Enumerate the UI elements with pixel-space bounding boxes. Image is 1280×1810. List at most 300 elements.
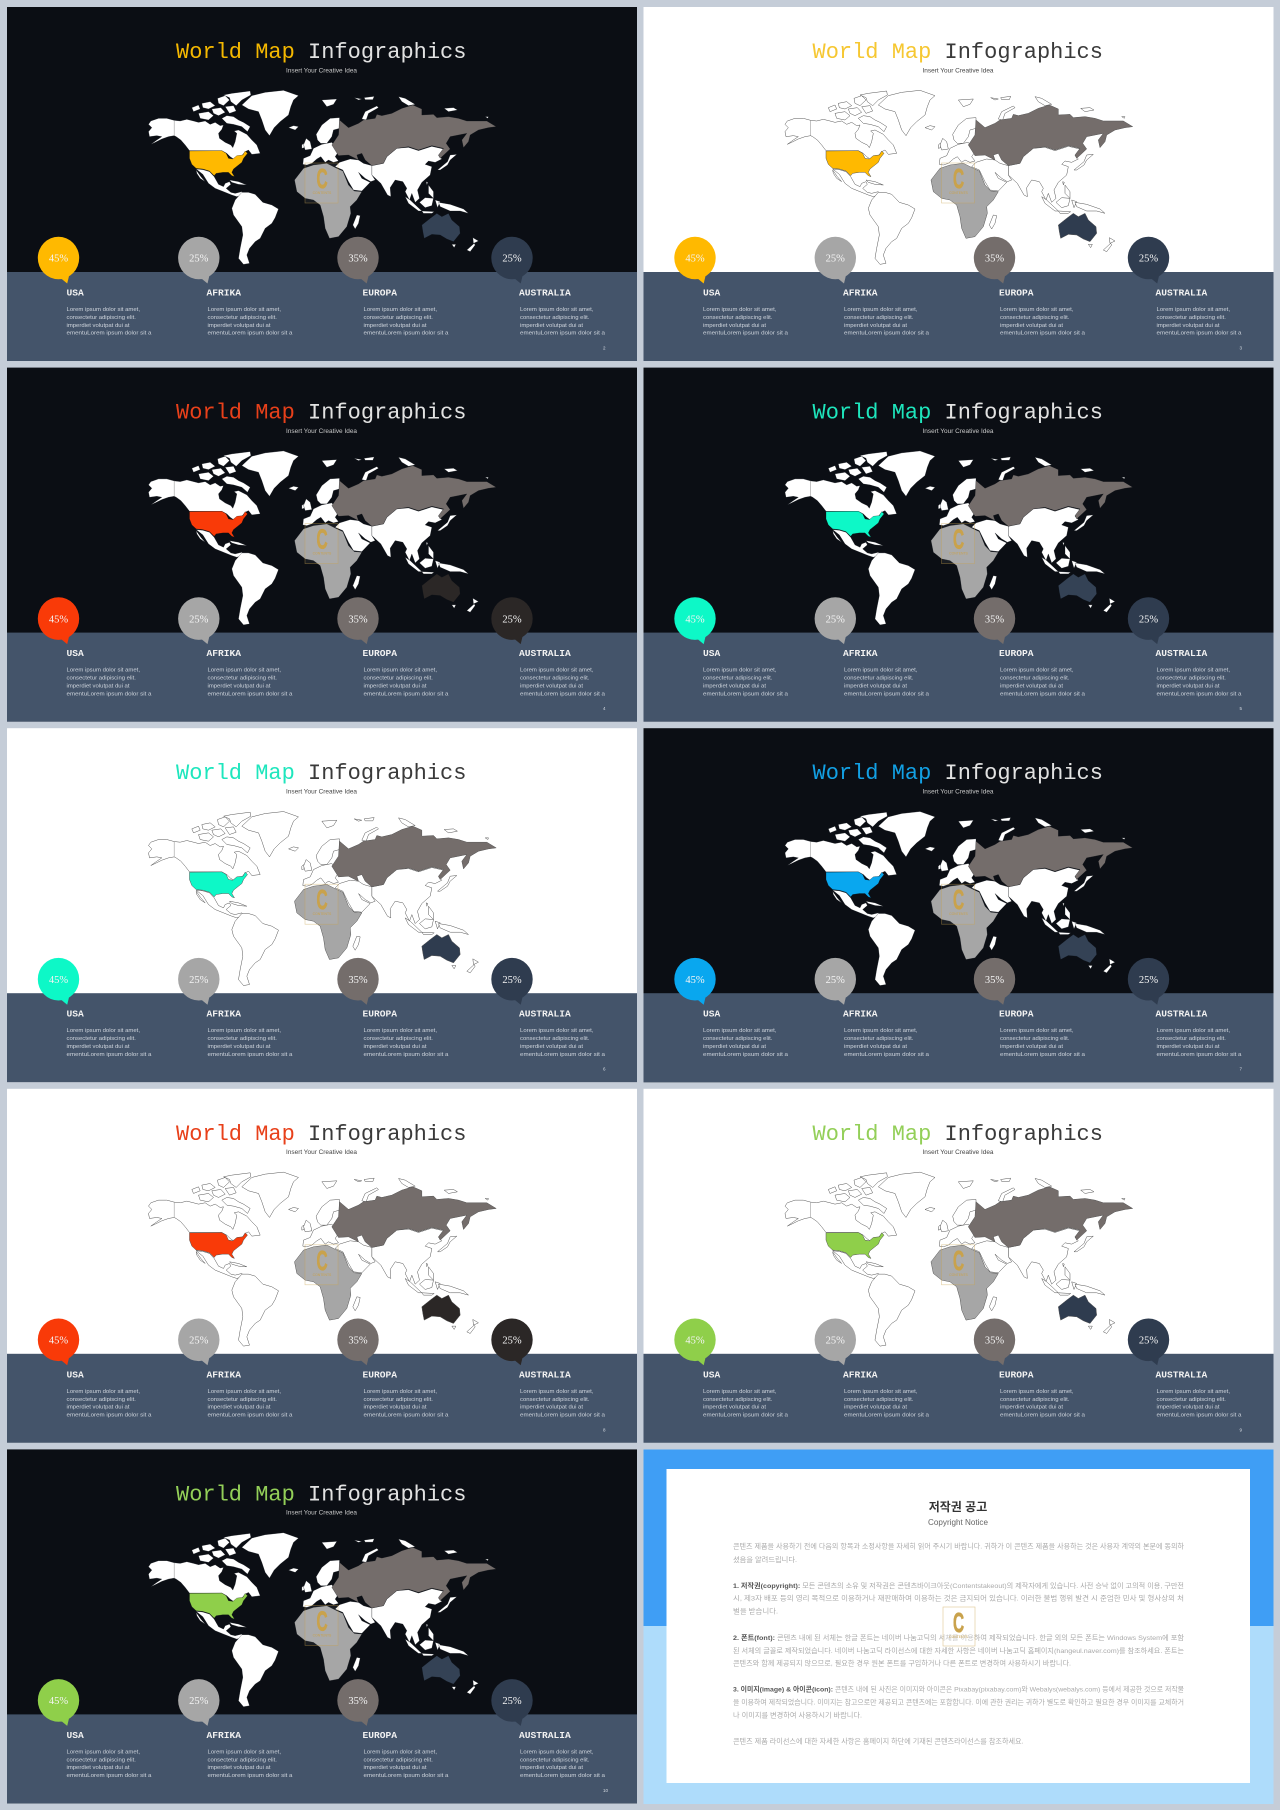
- text block: USA: imperdiet volutpat dui at: [703, 683, 766, 689]
- title: World Map Infographics: [176, 401, 466, 426]
- text block: Australia: consectetur adipiscing elit.: [1156, 1036, 1226, 1042]
- text block: Australia: Lorem ipsum dolor sit amet,: [520, 1389, 594, 1395]
- text block: USA: ementuLorem ipsum dolor sit a: [703, 331, 789, 337]
- page number: 7: [1240, 1067, 1242, 1072]
- subtitle: Insert Your Creative Idea: [922, 428, 994, 435]
- text block: Afrika: AFRIKA: [206, 1730, 241, 1741]
- text block: Afrika: AFRIKA: [206, 648, 241, 659]
- watermark: [305, 1605, 338, 1645]
- text block: Afrika: Lorem ipsum dolor sit amet,: [208, 1749, 281, 1755]
- notice body text: 2. 폰트(font): 콘텐츠 내에 된 서체는 한글 폰트는 네이버 나눔고딕의 서체를 이용하여 제작되었습니다. 한글 외의 모든 폰트는 Windows System에 포함: [733, 1633, 1184, 1642]
- text block: USA: USA: [66, 648, 84, 659]
- subtitle: Insert Your Creative Idea: [922, 1149, 994, 1156]
- watermark: C: [953, 1245, 964, 1276]
- notice body text: 벌을 받습니다.: [733, 1607, 778, 1616]
- bubble: Australia 25%: 25%: [502, 1696, 522, 1707]
- watermark: C: [316, 163, 328, 194]
- text block: Australia: Lorem ipsum dolor sit amet,: [1156, 307, 1230, 313]
- page number: 8: [603, 1427, 606, 1432]
- text block: Europa: [362, 1730, 449, 1779]
- watermark: C: [953, 524, 964, 555]
- text block: USA: [703, 288, 789, 337]
- page number: 10: [603, 1788, 609, 1793]
- text block: Afrika: ementuLorem ipsum dolor sit a: [844, 1052, 930, 1058]
- notice body text: 1. 저작권(copyright): 모든 콘텐츠의 소유 및 저작권은 콘텐츠바이크아웃(Contentstakeout)의 제작자에게 있습니다. 사전 승낙 없이 고의적 이용, 구만전: [733, 1581, 1184, 1590]
- bubble: Europa 35%: [337, 958, 379, 1005]
- panel: slide 7 white red: [7, 1089, 637, 1443]
- text block: Australia: imperdiet volutpat dui at: [520, 1044, 583, 1050]
- text block: Afrika: [206, 1369, 293, 1418]
- bubble: USA 45%: 45%: [49, 1696, 68, 1707]
- watermark: [305, 524, 338, 564]
- bubble: USA 45%: [38, 1679, 79, 1726]
- text block: USA: imperdiet volutpat dui at: [66, 1765, 130, 1771]
- bubble: Australia 25%: [491, 597, 533, 644]
- title: World Map Infographics: [812, 40, 1103, 65]
- text block: Afrika: [843, 1009, 930, 1058]
- world map: [148, 90, 496, 264]
- text block: Afrika: ementuLorem ipsum dolor sit a: [844, 1413, 930, 1419]
- watermark: [943, 1607, 975, 1646]
- text block: Afrika: ementuLorem ipsum dolor sit a: [208, 1773, 293, 1779]
- text block: Europa: Lorem ipsum dolor sit amet,: [364, 307, 437, 313]
- bubble: Afrika 25%: [815, 1318, 856, 1365]
- title: World Map Infographics: [176, 40, 466, 65]
- watermark: CONTENTS: [313, 552, 332, 556]
- watermark: C: [316, 524, 328, 555]
- text block: Afrika: ementuLorem ipsum dolor sit a: [208, 1052, 293, 1058]
- text block: Afrika: AFRIKA: [843, 648, 878, 659]
- page number: 4: [603, 706, 606, 711]
- bubble: Australia 25%: 25%: [502, 614, 522, 625]
- bubble: USA 45%: 45%: [49, 614, 68, 625]
- text block: USA: USA: [703, 648, 721, 659]
- text block: Afrika: AFRIKA: [206, 288, 241, 298]
- text block: Afrika: imperdiet volutpat dui at: [844, 323, 907, 329]
- text block: Australia: AUSTRALIA: [519, 1009, 571, 1020]
- bubble: Europa 35%: 35%: [348, 975, 368, 986]
- text block: Australia: ementuLorem ipsum dolor sit a: [520, 1773, 606, 1779]
- text block: Europa: consectetur adipiscing elit.: [364, 1757, 433, 1763]
- bubble: Australia 25%: [1128, 237, 1169, 284]
- bubble: Australia 25%: [491, 1318, 533, 1365]
- text block: Afrika: AFRIKA: [843, 1369, 878, 1380]
- text block: Afrika: Lorem ipsum dolor sit amet,: [844, 668, 918, 674]
- notice body text: 콘텐츠 제품을 사용하기 전에 다음의 항목과 소정사항을 자세히 읽어 주시기 바랍니다. 귀하가 이 콘텐츠 제품을 사용하는 것은 사용자 계약의 본문에 동의하: [733, 1542, 1185, 1551]
- text block: USA: ementuLorem ipsum dolor sit a: [66, 691, 152, 697]
- bubble: Europa 35%: [337, 597, 379, 644]
- bubble: Afrika 25%: 25%: [826, 1336, 845, 1347]
- text block: Europa: Lorem ipsum dolor sit amet,: [364, 668, 437, 674]
- text block: Europa: EUROPA: [999, 648, 1034, 659]
- bubble: Europa 35%: 35%: [348, 614, 368, 625]
- notice heading: 저작권 공고: [929, 1499, 987, 1514]
- panel: slide 9 dark green: [7, 1449, 637, 1803]
- world map: [148, 812, 496, 986]
- text block: Europa: imperdiet volutpat dui at: [364, 1765, 427, 1771]
- text block: USA: Lorem ipsum dolor sit amet,: [66, 1749, 140, 1755]
- text block: Europa: ementuLorem ipsum dolor sit a: [364, 1052, 449, 1058]
- text block: Australia: ementuLorem ipsum dolor sit a: [1156, 1413, 1242, 1419]
- text block: Europa: imperdiet volutpat dui at: [1000, 1044, 1063, 1050]
- bubble: USA 45%: 45%: [49, 1336, 68, 1347]
- panel: slide 2 white yellow: [644, 7, 1274, 361]
- text block: Australia: AUSTRALIA: [519, 648, 571, 659]
- text block: Afrika: [206, 288, 293, 337]
- text block: USA: Lorem ipsum dolor sit amet,: [703, 668, 777, 674]
- text block: Afrika: consectetur adipiscing elit.: [844, 676, 914, 682]
- bubble: Afrika 25%: [815, 597, 856, 644]
- text block: Australia: imperdiet volutpat dui at: [520, 683, 583, 689]
- text block: Europa: imperdiet volutpat dui at: [364, 683, 427, 689]
- bubble: Afrika 25%: 25%: [189, 1336, 209, 1347]
- text block: Australia: imperdiet volutpat dui at: [1156, 323, 1220, 329]
- text block: Australia: [1156, 1369, 1242, 1418]
- text block: Europa: imperdiet volutpat dui at: [1000, 683, 1063, 689]
- bubble: Australia 25%: 25%: [502, 254, 522, 265]
- text block: Afrika: ementuLorem ipsum dolor sit a: [208, 691, 293, 697]
- text block: Australia: Lorem ipsum dolor sit amet,: [1156, 1389, 1230, 1395]
- title: World Map Infographics: [176, 1122, 466, 1147]
- title: World Map Infographics: [812, 401, 1103, 426]
- text block: Afrika: [843, 648, 930, 697]
- text block: Europa: Lorem ipsum dolor sit amet,: [1000, 1028, 1074, 1034]
- text block: USA: consectetur adipiscing elit.: [703, 315, 773, 321]
- bubble: USA 45%: [38, 1318, 79, 1365]
- bubble: Australia 25%: [491, 237, 533, 284]
- text block: USA: [703, 1369, 789, 1418]
- bubble: Europa 35%: 35%: [348, 254, 368, 265]
- bubble: USA 45%: 45%: [685, 1336, 705, 1347]
- text block: Australia: consectetur adipiscing elit.: [520, 1397, 590, 1403]
- text block: Europa: EUROPA: [362, 648, 397, 659]
- bubble: Afrika 25%: [815, 958, 856, 1005]
- text block: USA: consectetur adipiscing elit.: [703, 676, 773, 682]
- text block: Europa: consectetur adipiscing elit.: [1000, 1036, 1070, 1042]
- text block: Europa: EUROPA: [362, 1369, 397, 1380]
- bubble: Europa 35%: 35%: [985, 614, 1004, 625]
- text block: Europa: [362, 1369, 449, 1418]
- title: World Map Infographics: [812, 1122, 1103, 1147]
- bubble: Australia 25%: 25%: [1139, 614, 1158, 625]
- text block: USA: imperdiet volutpat dui at: [703, 1405, 766, 1411]
- bubble: Europa 35%: 35%: [348, 1336, 368, 1347]
- text block: Australia: AUSTRALIA: [1156, 1369, 1208, 1380]
- bubble: USA 45%: [674, 1318, 716, 1365]
- bubble: Europa 35%: [974, 1318, 1015, 1365]
- bubble: USA 45%: [674, 237, 716, 284]
- watermark: CONTENTS: [949, 552, 969, 556]
- bubble: Afrika 25%: 25%: [826, 614, 845, 625]
- text block: USA: Lorem ipsum dolor sit amet,: [66, 1389, 140, 1395]
- text block: USA: consectetur adipiscing elit.: [66, 315, 136, 321]
- text block: Afrika: consectetur adipiscing elit.: [208, 1397, 277, 1403]
- text block: Australia: [1156, 288, 1242, 337]
- text block: Afrika: Lorem ipsum dolor sit amet,: [208, 1028, 281, 1034]
- bubble: Afrika 25%: [178, 1318, 220, 1365]
- text block: USA: ementuLorem ipsum dolor sit a: [703, 1413, 789, 1419]
- text block: Australia: imperdiet volutpat dui at: [520, 1765, 583, 1771]
- title: World Map Infographics: [176, 761, 466, 786]
- text block: USA: Lorem ipsum dolor sit amet,: [703, 1389, 777, 1395]
- notice body text: 셨음을 알려드립니다.: [733, 1555, 797, 1564]
- text block: Afrika: [206, 1009, 293, 1058]
- bubble: Afrika 25%: 25%: [189, 614, 209, 625]
- title: World Map Infographics: [176, 1482, 466, 1507]
- text block: USA: ementuLorem ipsum dolor sit a: [703, 1052, 789, 1058]
- text block: Afrika: ementuLorem ipsum dolor sit a: [208, 331, 293, 337]
- panel: copyright notice: [644, 1450, 1274, 1804]
- text block: Australia: imperdiet volutpat dui at: [520, 1405, 583, 1411]
- panel: slide 8 white green: [644, 1089, 1274, 1443]
- subtitle: Insert Your Creative Idea: [286, 1149, 357, 1156]
- text block: Australia: AUSTRALIA: [519, 288, 571, 298]
- text block: Europa: [362, 648, 449, 697]
- world map: [785, 812, 1133, 986]
- world map: [785, 90, 1133, 264]
- text block: Australia: imperdiet volutpat dui at: [1156, 1405, 1220, 1411]
- text block: Europa: consectetur adipiscing elit.: [1000, 676, 1070, 682]
- bubble: Australia 25%: 25%: [1139, 1336, 1158, 1347]
- watermark: [942, 163, 974, 203]
- text block: USA: ementuLorem ipsum dolor sit a: [66, 1773, 152, 1779]
- text block: USA: Lorem ipsum dolor sit amet,: [703, 1028, 777, 1034]
- text block: Afrika: Lorem ipsum dolor sit amet,: [844, 1389, 918, 1395]
- text block: Australia: AUSTRALIA: [1156, 288, 1208, 298]
- bubble: Afrika 25%: [178, 958, 220, 1005]
- text block: Europa: Lorem ipsum dolor sit amet,: [1000, 668, 1074, 674]
- text block: Afrika: consectetur adipiscing elit.: [208, 1757, 277, 1763]
- text block: Afrika: Lorem ipsum dolor sit amet,: [208, 668, 281, 674]
- watermark: [942, 884, 974, 924]
- text block: Australia: imperdiet volutpat dui at: [1156, 1044, 1220, 1050]
- text block: Europa: consectetur adipiscing elit.: [364, 1036, 433, 1042]
- bubble: Australia 25%: [1128, 1318, 1169, 1365]
- text block: Afrika: AFRIKA: [206, 1369, 241, 1380]
- world map: [148, 1533, 496, 1707]
- text block: Australia: ementuLorem ipsum dolor sit a: [520, 1413, 606, 1419]
- panel: slide 5 white teal: [7, 728, 637, 1082]
- notice body text: 된 서체의 글꼴로 제작되었습니다. 네이버 나눔고딕 라이선스에 대한 자세한 사항은 네이버 나눔고딕 홈페이지(hangeul.naver.com)를 참조하세요. 폰트는: [733, 1646, 1184, 1655]
- text block: USA: consectetur adipiscing elit.: [703, 1397, 773, 1403]
- text block: USA: consectetur adipiscing elit.: [66, 1397, 136, 1403]
- watermark: CONTENTS: [313, 912, 332, 916]
- text block: Europa: ementuLorem ipsum dolor sit a: [364, 331, 449, 337]
- text block: USA: Lorem ipsum dolor sit amet,: [66, 1028, 140, 1034]
- bubble: Europa 35%: 35%: [985, 254, 1004, 265]
- text block: Australia: imperdiet volutpat dui at: [520, 323, 583, 329]
- text block: USA: imperdiet volutpat dui at: [703, 323, 766, 329]
- watermark: CONTENTS: [313, 1633, 332, 1637]
- bubble: Australia 25%: 25%: [1139, 254, 1158, 265]
- text block: Afrika: Lorem ipsum dolor sit amet,: [844, 1028, 918, 1034]
- text block: Australia: Lorem ipsum dolor sit amet,: [520, 668, 594, 674]
- text block: USA: ementuLorem ipsum dolor sit a: [66, 331, 152, 337]
- text block: USA: ementuLorem ipsum dolor sit a: [66, 1413, 152, 1419]
- bubble: Afrika 25%: 25%: [189, 1696, 209, 1707]
- text block: Afrika: AFRIKA: [843, 288, 878, 298]
- text block: USA: USA: [66, 1730, 84, 1741]
- text block: Europa: imperdiet volutpat dui at: [1000, 323, 1063, 329]
- text block: Europa: Lorem ipsum dolor sit amet,: [364, 1389, 437, 1395]
- bubble: USA 45%: [38, 958, 79, 1005]
- text block: USA: imperdiet volutpat dui at: [703, 1044, 766, 1050]
- text block: Afrika: imperdiet volutpat dui at: [208, 323, 271, 329]
- bubble: Australia 25%: 25%: [502, 975, 522, 986]
- text block: Australia: Lorem ipsum dolor sit amet,: [520, 1028, 594, 1034]
- text block: USA: [66, 1009, 152, 1058]
- text block: Europa: ementuLorem ipsum dolor sit a: [1000, 331, 1086, 337]
- bubble: Afrika 25%: [178, 237, 220, 284]
- text block: Australia: Lorem ipsum dolor sit amet,: [520, 307, 594, 313]
- notice body text: 을 이용하여 제작되었습니다. 이미지는 참고으로만 제공되고 콘텐츠에는 포함합니다. 이에 관한 권리는 귀하가 별도로 확인하고 필요한 경우 이미지를 교체하거: [733, 1698, 1184, 1707]
- text block: Australia: consectetur adipiscing elit.: [520, 1757, 590, 1763]
- text block: USA: imperdiet volutpat dui at: [66, 323, 130, 329]
- bubble: Australia 25%: [1128, 958, 1169, 1005]
- text block: Europa: ementuLorem ipsum dolor sit a: [1000, 691, 1086, 697]
- text block: Europa: imperdiet volutpat dui at: [364, 1044, 427, 1050]
- text block: USA: USA: [703, 1369, 721, 1380]
- text block: Australia: ementuLorem ipsum dolor sit a: [1156, 1052, 1242, 1058]
- text block: Afrika: imperdiet volutpat dui at: [844, 1405, 907, 1411]
- notice body text: 3. 이미지(image) & 아이콘(icon): 콘텐츠 내에 된 사진은 이미지와 아이콘은 Pixabay(pixabay.com)와 Webalys(webalys.com) 등에서 제공한 것으로 저작물: [733, 1685, 1184, 1694]
- text block: Afrika: [843, 288, 930, 337]
- text block: USA: consectetur adipiscing elit.: [66, 1757, 136, 1763]
- text block: Europa: EUROPA: [999, 1009, 1034, 1020]
- bubble: Europa 35%: [974, 958, 1015, 1005]
- text block: Australia: consectetur adipiscing elit.: [1156, 315, 1226, 321]
- text block: USA: Lorem ipsum dolor sit amet,: [703, 307, 777, 313]
- world map: [148, 1172, 496, 1346]
- watermark: C: [316, 884, 328, 915]
- text block: USA: [703, 648, 789, 697]
- text block: Australia: Lorem ipsum dolor sit amet,: [1156, 668, 1230, 674]
- text block: Australia: AUSTRALIA: [519, 1369, 571, 1380]
- text block: Europa: Lorem ipsum dolor sit amet,: [364, 1028, 437, 1034]
- text block: Afrika: AFRIKA: [206, 1009, 241, 1020]
- text block: USA: imperdiet volutpat dui at: [66, 1405, 130, 1411]
- text block: Afrika: imperdiet volutpat dui at: [208, 1405, 271, 1411]
- text block: USA: USA: [703, 288, 721, 298]
- text block: Europa: imperdiet volutpat dui at: [364, 1405, 427, 1411]
- text block: Europa: consectetur adipiscing elit.: [1000, 1397, 1070, 1403]
- text block: Australia: [519, 288, 606, 337]
- text block: Europa: consectetur adipiscing elit.: [364, 1397, 433, 1403]
- bubble: USA 45%: 45%: [685, 614, 705, 625]
- subtitle: Insert Your Creative Idea: [286, 67, 357, 74]
- text block: USA: [66, 1730, 152, 1779]
- text block: Afrika: ementuLorem ipsum dolor sit a: [844, 691, 930, 697]
- text block: Australia: consectetur adipiscing elit.: [520, 676, 590, 682]
- text block: Australia: ementuLorem ipsum dolor sit a: [520, 691, 606, 697]
- notice body text: [733, 1542, 1185, 1746]
- watermark: [305, 163, 338, 203]
- text block: USA: consectetur adipiscing elit.: [703, 1036, 773, 1042]
- watermark: CONTENTS: [313, 191, 332, 195]
- bubble: USA 45%: [674, 597, 716, 644]
- bubble: Europa 35%: [974, 237, 1015, 284]
- watermark: CONTENTS: [949, 912, 969, 916]
- subtitle: Insert Your Creative Idea: [286, 1510, 357, 1517]
- text block: Europa: EUROPA: [362, 1009, 397, 1020]
- text block: Europa: imperdiet volutpat dui at: [364, 323, 427, 329]
- watermark: C: [316, 1245, 328, 1276]
- text block: Australia: ementuLorem ipsum dolor sit a: [1156, 331, 1242, 337]
- bubble: Europa 35%: 35%: [985, 1336, 1004, 1347]
- text block: Europa: imperdiet volutpat dui at: [1000, 1405, 1063, 1411]
- watermark: [942, 524, 974, 564]
- watermark: [305, 884, 338, 924]
- text block: USA: [703, 1009, 789, 1058]
- text block: Afrika: [206, 648, 293, 697]
- text block: Europa: [362, 288, 449, 337]
- text block: Afrika: imperdiet volutpat dui at: [208, 1044, 271, 1050]
- bubble: Europa 35%: [337, 1318, 379, 1365]
- bubble: Afrika 25%: [178, 597, 220, 644]
- bubble: USA 45%: 45%: [49, 254, 68, 265]
- text block: USA: USA: [66, 1009, 84, 1020]
- bubble: Australia 25%: [491, 958, 533, 1005]
- watermark: C: [953, 163, 964, 194]
- bubble: Europa 35%: 35%: [348, 1696, 368, 1707]
- text block: Europa: Lorem ipsum dolor sit amet,: [364, 1749, 437, 1755]
- watermark: C: [316, 1606, 328, 1637]
- text block: Australia: ementuLorem ipsum dolor sit a: [1156, 691, 1242, 697]
- page number: 9: [1240, 1427, 1242, 1432]
- text block: Australia: AUSTRALIA: [519, 1730, 571, 1741]
- text block: USA: Lorem ipsum dolor sit amet,: [66, 307, 140, 313]
- text block: Australia: consectetur adipiscing elit.: [520, 315, 590, 321]
- text block: Afrika: ementuLorem ipsum dolor sit a: [844, 331, 930, 337]
- watermark: [305, 1245, 338, 1285]
- world map: [785, 1172, 1133, 1346]
- notice body text: 콘텐츠 제품 라이선스에 대한 자세한 사항은 홈페이지 하단에 기재된 콘텐츠라이선스를 참조하세요.: [733, 1737, 1024, 1746]
- bubble: USA 45%: 45%: [685, 975, 705, 986]
- watermark: [942, 1245, 974, 1285]
- text block: Europa: consectetur adipiscing elit.: [364, 315, 433, 321]
- text block: Afrika: consectetur adipiscing elit.: [208, 315, 277, 321]
- text block: Afrika: [206, 1730, 293, 1779]
- text block: Australia: consectetur adipiscing elit.: [520, 1036, 590, 1042]
- subtitle: Insert Your Creative Idea: [922, 789, 994, 796]
- text block: USA: consectetur adipiscing elit.: [66, 676, 136, 682]
- text block: Afrika: imperdiet volutpat dui at: [208, 683, 271, 689]
- text block: Europa: consectetur adipiscing elit.: [364, 676, 433, 682]
- text block: USA: imperdiet volutpat dui at: [66, 1044, 130, 1050]
- text block: Afrika: imperdiet volutpat dui at: [844, 683, 907, 689]
- watermark: CONTENTS: [313, 1273, 332, 1277]
- text block: Australia: [519, 1369, 606, 1418]
- watermark: C: [953, 884, 964, 915]
- text block: Australia: Lorem ipsum dolor sit amet,: [520, 1749, 594, 1755]
- text block: Australia: ementuLorem ipsum dolor sit a: [520, 1052, 606, 1058]
- bubble: Europa 35%: [974, 597, 1015, 644]
- watermark: CONTENTS: [949, 1273, 969, 1277]
- text block: Australia: [1156, 1009, 1242, 1058]
- text block: Afrika: Lorem ipsum dolor sit amet,: [844, 307, 918, 313]
- text block: Australia: ementuLorem ipsum dolor sit a: [520, 331, 606, 337]
- text block: USA: USA: [703, 1009, 721, 1020]
- bubble: Afrika 25%: 25%: [189, 975, 209, 986]
- notice body text: 나 이미지를 변경하여 사용하시기 바랍니다.: [733, 1711, 862, 1720]
- text block: USA: USA: [66, 1369, 84, 1380]
- text block: Europa: ementuLorem ipsum dolor sit a: [364, 1413, 449, 1419]
- text block: Australia: Lorem ipsum dolor sit amet,: [1156, 1028, 1230, 1034]
- text block: USA: [66, 648, 152, 697]
- world map: [148, 451, 496, 625]
- text block: Europa: ementuLorem ipsum dolor sit a: [1000, 1052, 1086, 1058]
- text block: Afrika: [843, 1369, 930, 1418]
